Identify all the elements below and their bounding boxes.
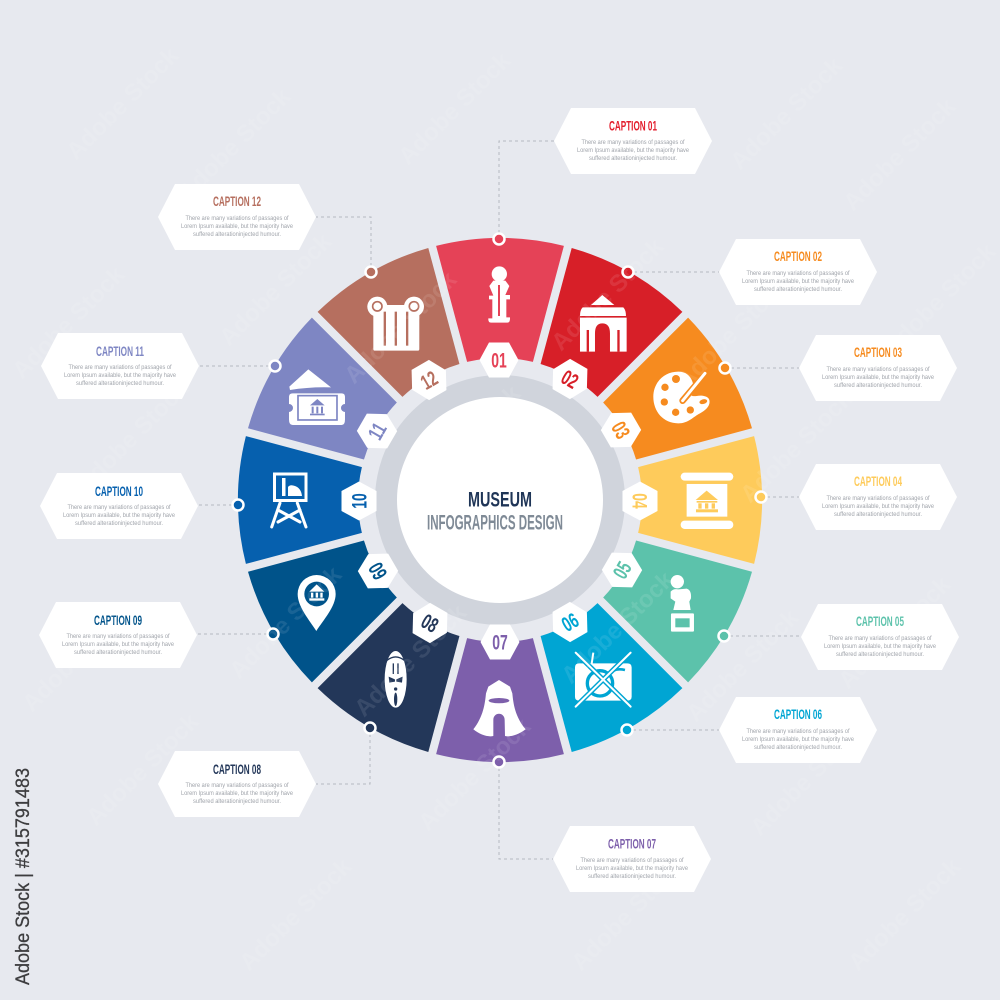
number badge 07: 07 (492, 632, 508, 654)
segment 12 (314, 241, 486, 412)
marker dot 04 (756, 492, 766, 502)
segment 07 (436, 638, 564, 762)
stock watermark pattern: Adobe Stock (214, 228, 338, 351)
caption 08: CAPTION 08 (213, 761, 261, 777)
caption 03: Lorem Ipsum available, but the majority have (822, 374, 934, 381)
number badge 06: 06 (558, 609, 583, 637)
caption 06 (719, 697, 877, 763)
number badge 03: 03 (606, 418, 634, 443)
marker dot 01 (494, 234, 504, 244)
icon: location pin with bank (298, 575, 336, 631)
caption 05: CAPTION 05 (856, 613, 904, 629)
number badge 01: 01 (491, 350, 507, 372)
segment 11 (241, 314, 412, 486)
stock watermark pattern: Adobe Stock (234, 853, 358, 976)
caption 12: There are many variations of passages of (186, 215, 289, 222)
icon: no camera (575, 653, 632, 707)
caption 07 (553, 826, 711, 892)
caption 04: Lorem Ipsum available, but the majority have (822, 503, 934, 510)
segment 04 (638, 436, 762, 564)
caption 04: There are many variations of passages of (826, 495, 930, 502)
number badge 12 (403, 355, 455, 405)
caption 06: CAPTION 06 (774, 706, 822, 722)
icon: painting on easel (272, 474, 306, 527)
number badge 11: 11 (364, 419, 392, 444)
number badge 01 (480, 342, 518, 378)
caption 11: suffered alterationinjected humour. (76, 380, 164, 387)
number badge 04 (622, 482, 658, 520)
stock watermark pattern: Adobe Stock (173, 83, 297, 206)
marker dot 10 (232, 500, 244, 510)
number badge 06 (544, 597, 596, 647)
caption 08: Lorem Ipsum available, but the majority have (181, 790, 293, 797)
caption 01: suffered alterationinjected humour. (589, 155, 677, 162)
caption 04: suffered alterationinjected humour. (834, 511, 922, 518)
stock watermark pattern: Adobe Stock (81, 708, 205, 831)
marker dot 03 (720, 362, 730, 374)
number badge 10 (342, 482, 376, 520)
stock watermark pattern: Adobe Stock (17, 594, 141, 717)
caption 11: Lorem Ipsum available, but the majority have (64, 372, 176, 379)
caption 12: suffered alterationinjected humour. (193, 231, 281, 238)
connector lines (197, 141, 802, 859)
caption 11: There are many variations of passages of (68, 364, 172, 371)
caption 07: There are many variations of passages of (580, 857, 684, 864)
stock watermark pattern: Adobe Stock (61, 42, 185, 165)
caption 09: Lorem Ipsum available, but the majority have (62, 641, 174, 648)
stock watermark pattern: Adobe Stock (681, 604, 805, 727)
caption 10: CAPTION 10 (95, 483, 143, 499)
caption 02: CAPTION 02 (774, 248, 822, 264)
stock watermark pattern: Adobe Stock (393, 47, 517, 170)
caption 07: Lorem Ipsum available, but the majority have (576, 865, 688, 872)
number badge 09: 09 (363, 559, 391, 584)
caption 11 (41, 333, 199, 399)
caption 05: suffered alterationinjected humour. (836, 651, 924, 658)
icon: tribal mask (385, 651, 407, 708)
caption 02: There are many variations of passages of (746, 270, 850, 277)
caption 12: Lorem Ipsum available, but the majority have (181, 223, 293, 230)
segment 01 (436, 238, 564, 362)
stock watermark pattern: Adobe Stock (878, 238, 1000, 361)
stock watermark pattern: Adobe Stock (413, 713, 537, 836)
caption 06: suffered alterationinjected humour. (754, 744, 842, 751)
caption 07: suffered alterationinjected humour. (588, 873, 676, 880)
caption 11: CAPTION 11 (96, 343, 144, 359)
subtitle: INFOGRAPHICS DESIGN (427, 512, 563, 534)
stock watermark pattern: Adobe Stock (566, 853, 690, 976)
caption 06: Lorem Ipsum available, but the majority have (742, 736, 854, 743)
caption 01: Lorem Ipsum available, but the majority have (577, 147, 689, 154)
caption 09 (39, 602, 197, 668)
caption 09: CAPTION 09 (94, 612, 142, 628)
segment 02 (514, 241, 686, 412)
marker dot 12 (366, 266, 376, 278)
caption 01: There are many variations of passages of (582, 139, 685, 146)
stock watermark pattern: Adobe Stock (546, 233, 670, 356)
caption 02: Lorem Ipsum available, but the majority have (742, 278, 854, 285)
stock watermark pattern: Adobe Stock (403, 380, 527, 503)
marker dot 05 (718, 630, 730, 642)
caption 04 (799, 464, 957, 530)
caption 07: CAPTION 07 (608, 836, 656, 852)
icon: scroll with bank (681, 473, 733, 529)
stock watermark pattern: Adobe Stock (745, 718, 869, 841)
caption 03: CAPTION 03 (854, 344, 902, 360)
segment 06 (514, 588, 686, 759)
number badge 12: 12 (417, 367, 442, 395)
marker dot 09 (268, 628, 278, 640)
stock watermark pattern: Adobe Stock (843, 853, 967, 976)
marker dot 11 (270, 360, 280, 372)
caption 12 (158, 184, 316, 250)
number badge 08: 08 (417, 610, 442, 638)
caption 05: Lorem Ipsum available, but the majority have (824, 643, 936, 650)
caption 10: There are many variations of passages of (68, 504, 171, 511)
centre white disc (397, 397, 603, 603)
caption 10 (40, 473, 198, 539)
icon: palette (653, 372, 710, 423)
centre ring (375, 375, 625, 625)
caption 02 (719, 239, 877, 305)
caption 01 (554, 108, 712, 174)
caption 02: suffered alterationinjected humour. (754, 286, 842, 293)
stock watermark pattern: Adobe Stock (349, 599, 473, 722)
icon: temple (580, 295, 627, 352)
icon: museum tickets (289, 369, 345, 425)
segment 09 (241, 514, 412, 686)
stock watermark pattern: Adobe Stock (838, 93, 962, 216)
number badge 05 (597, 544, 647, 596)
number badge 02: 02 (557, 366, 582, 394)
stock watermark pattern: Adobe Stock (224, 561, 348, 684)
number badge 07 (480, 624, 520, 660)
stock watermark pattern: Adobe Stock (833, 571, 957, 694)
icon: ionic column (367, 297, 424, 351)
caption 08: suffered alterationinjected humour. (193, 798, 281, 805)
number badge 05: 05 (609, 558, 637, 583)
stock watermark pattern: Adobe Stock (725, 52, 849, 175)
caption 03: suffered alterationinjected humour. (834, 382, 922, 389)
caption 03: There are many variations of passages of (826, 366, 930, 373)
icon: bust on pedestal (671, 575, 694, 632)
icon: statuette (488, 266, 510, 323)
stock watermark pattern: Adobe Stock (7, 261, 131, 384)
number badge 09 (353, 545, 403, 597)
caption 05: There are many variations of passages of (828, 635, 932, 642)
number badge 02 (544, 354, 596, 404)
caption 06: There are many variations of passages of (746, 728, 850, 735)
caption 10: suffered alterationinjected humour. (75, 520, 163, 527)
caption 03 (799, 335, 957, 401)
title: MUSEUM (468, 488, 532, 512)
number badge 08 (404, 598, 456, 648)
segment 08 (314, 588, 486, 759)
segment 05 (588, 514, 759, 686)
marker dot 02 (622, 266, 634, 278)
caption 01: CAPTION 01 (609, 118, 657, 134)
caption 08 (158, 751, 316, 817)
marker dot 07 (494, 756, 504, 768)
number badge 04: 04 (628, 493, 650, 509)
icon: helmet (473, 680, 526, 736)
stock watermark pattern: Adobe Stock (671, 271, 795, 394)
segment 03 (588, 314, 759, 486)
caption 04: CAPTION 04 (854, 473, 902, 489)
caption 09: suffered alterationinjected humour. (74, 649, 162, 656)
caption 09: There are many variations of passages of (66, 633, 170, 640)
marker dot 08 (364, 722, 376, 734)
marker dot 06 (622, 724, 632, 736)
stock watermark pattern: Adobe Stock (735, 385, 859, 508)
segment 10 (238, 436, 362, 564)
caption 05 (801, 604, 959, 670)
number badge 03 (596, 404, 646, 456)
stock watermark pattern: Adobe Stock (71, 375, 195, 498)
stock watermark pattern: Adobe Stock (339, 266, 463, 389)
stock watermark pattern: Adobe Stock (556, 566, 680, 689)
stock id side label: Adobe Stock | #315791483 (13, 768, 34, 985)
caption 12: CAPTION 12 (213, 193, 261, 209)
caption 08: There are many variations of passages of (186, 782, 289, 789)
caption 10: Lorem Ipsum available, but the majority have (63, 512, 175, 519)
number badge 10: 10 (348, 493, 372, 509)
number badge 11 (352, 405, 402, 457)
